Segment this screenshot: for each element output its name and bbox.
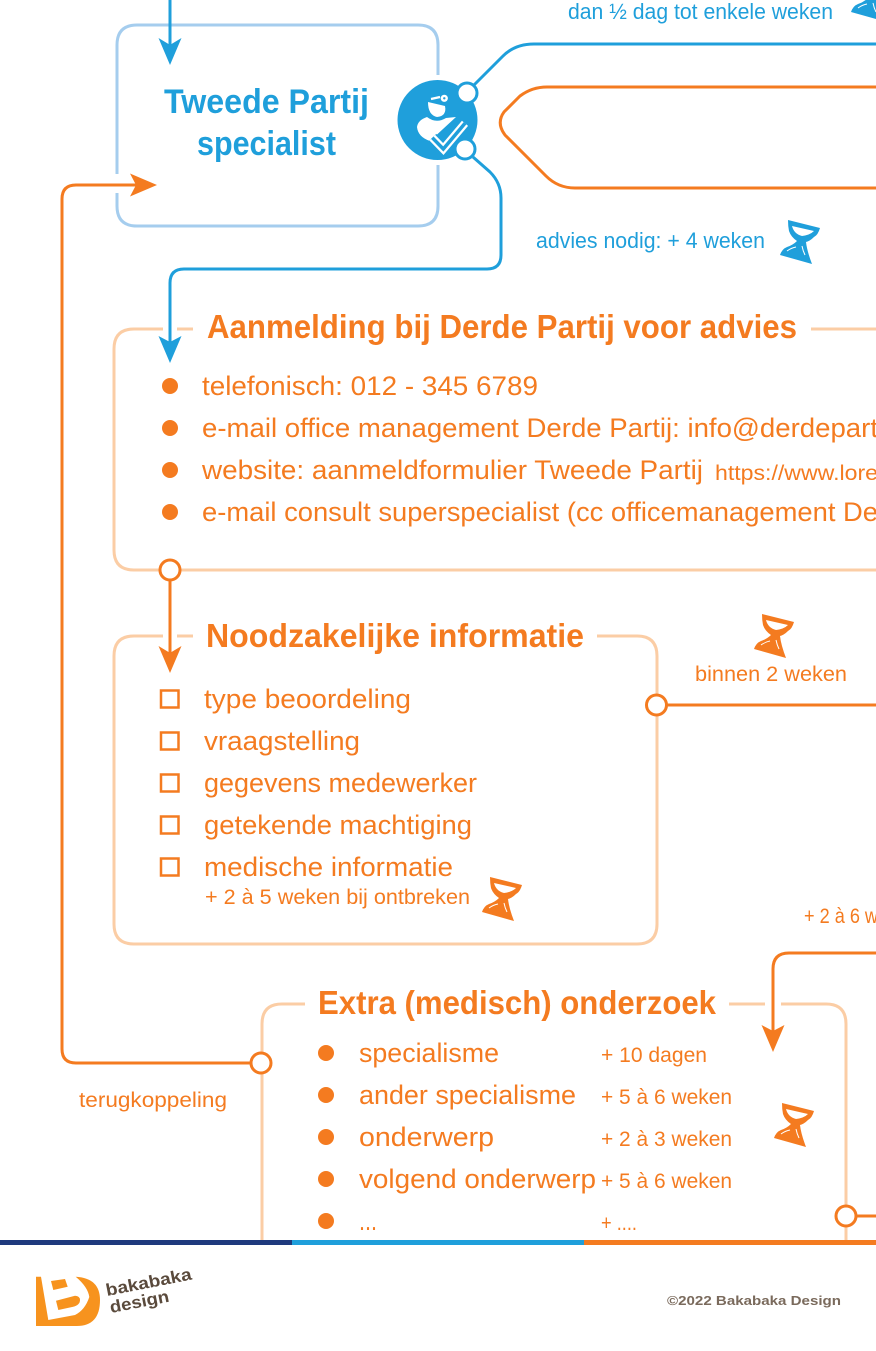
label: within 2 weeks: binnen 2 weken [695, 663, 847, 686]
research list: onderwerp [359, 1122, 494, 1152]
research list: ... [359, 1206, 377, 1236]
research list: + 5 à 6 weken [601, 1170, 732, 1193]
heading: noodzakelijke informatie: Noodzakelijke informatie [206, 617, 584, 654]
arrow: into extra onderzoek [762, 953, 876, 1052]
heading: aanmelding: Aanmelding bij Derde Partij voor advies [207, 308, 797, 345]
checklist: + 2 à 5 weken bij ontbreken [205, 886, 470, 909]
arrow: incoming blue [158, 0, 182, 65]
node: aanmelding [160, 560, 180, 580]
research list: + 5 à 6 weken [601, 1086, 732, 1109]
connector: within 2 weeks [667, 704, 876, 706]
logo: design [108, 1287, 171, 1317]
node: blue bottom [455, 139, 475, 159]
panel: noodzakelijke informatie [114, 617, 657, 944]
icon: hourglass advice [780, 220, 820, 264]
arrow: feedback [62, 174, 250, 1063]
node: feedback [251, 1053, 271, 1073]
heading: extra onderzoek: Extra (medisch) onderzoek [318, 984, 717, 1021]
heading: tweede partij: Tweede Partij [164, 83, 369, 121]
icon: hourglass top [851, 0, 876, 21]
node: extra onderzoek [836, 1206, 856, 1226]
panel: aanmelding derde partij [114, 308, 876, 570]
label: feedback: terugkoppeling [79, 1089, 227, 1112]
checklist: type beoordeling [204, 684, 411, 714]
contact list: e-mail consult superspecialist (cc officemanagement De [202, 497, 876, 527]
logo: bakabaka [104, 1265, 194, 1300]
icon: specialist [398, 80, 478, 160]
label: advice needed: advies nodig: + 4 weken [536, 228, 765, 253]
node: blue top [457, 83, 477, 103]
connector: extra onderzoek exit [857, 1214, 876, 1218]
panel: tweede partij specialist: specialist [197, 125, 336, 163]
contact list: e-mail office management Derde Partij: info@derdepart [202, 413, 876, 443]
connector: blue advice route [170, 157, 501, 350]
research list: + 10 dagen [601, 1044, 707, 1067]
research list: volgend onderwerp [359, 1164, 596, 1194]
research list: specialisme [359, 1038, 499, 1068]
icon: hourglass research [774, 1103, 814, 1147]
checklist: vraagstelling [204, 726, 360, 756]
contact list [162, 371, 876, 527]
connector: blue top route [474, 44, 876, 85]
icon: hourglass within 2 weeks [754, 614, 794, 658]
icon: hourglass missing info [482, 877, 522, 921]
research list: + 2 à 3 weken [601, 1128, 732, 1151]
node: noodzakelijk [646, 695, 666, 715]
connector: orange route [500, 87, 876, 188]
contact list: website: aanmeldformulier Tweede Partij [201, 455, 703, 485]
panel: extra medisch onderzoek [262, 984, 846, 1240]
checklist: medische informatie [204, 852, 453, 882]
panel: tweede partij specialist [117, 25, 438, 226]
contact list: https://www.lore [715, 462, 876, 485]
checklist: getekende machtiging [204, 810, 472, 840]
research list [318, 1038, 732, 1236]
research list: + .... [601, 1212, 637, 1235]
connector: aanmelding to noodzakelijk [158, 575, 182, 673]
checklist [161, 684, 477, 909]
checklist: gegevens medewerker [204, 768, 477, 798]
arrow: into aanmelding [158, 336, 182, 363]
research list: ander specialisme [359, 1080, 576, 1110]
logo [36, 1265, 194, 1326]
footer band [0, 1240, 876, 1245]
contact list: telefonisch: 012 - 345 6789 [202, 371, 538, 401]
copyright: ©2022 Bakabaka Design [667, 1293, 841, 1308]
